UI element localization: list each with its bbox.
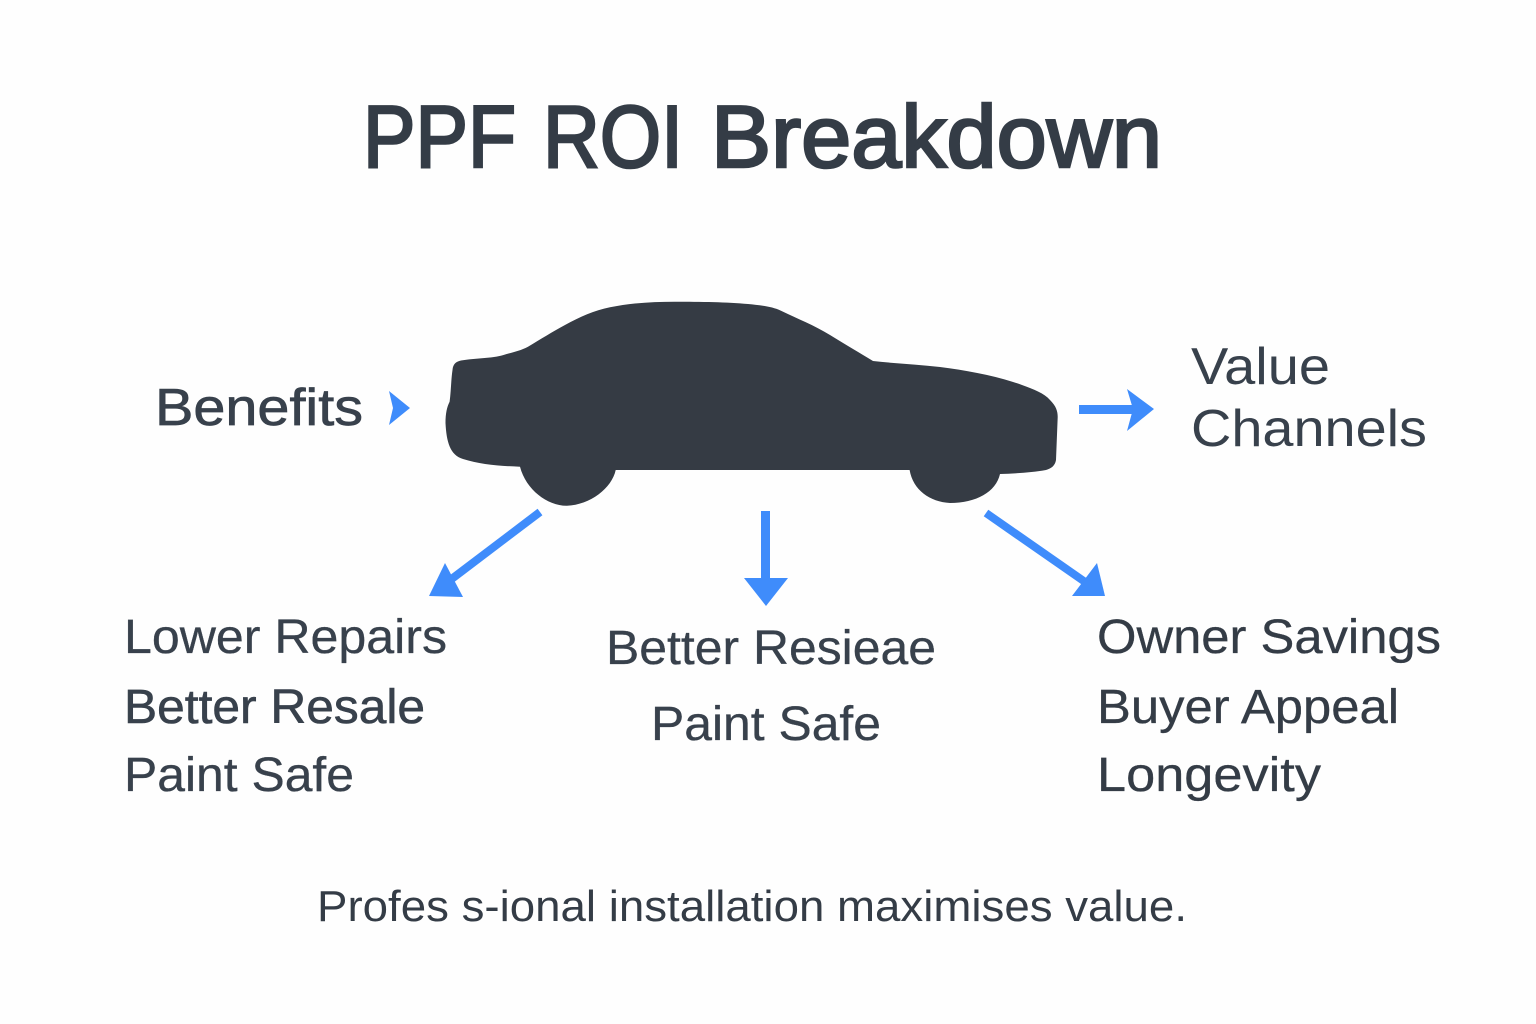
arrow: to value channels [1079, 389, 1154, 431]
label: value channels: Channels [1191, 400, 1427, 458]
label: value channels [1191, 338, 1427, 458]
title: PPF [363, 87, 516, 186]
list: left column: Lower Repairs [124, 611, 447, 664]
list: centre column [606, 622, 936, 751]
list: centre column: Better Resieae [606, 622, 936, 675]
list: right column: Owner Savings [1097, 611, 1441, 664]
list: right column: Buyer Appeal [1097, 681, 1399, 734]
icon: car silhouette [446, 302, 1058, 506]
arrow: down left [429, 512, 540, 597]
list: centre column: Paint Safe [651, 698, 881, 751]
title: Breakdown [711, 87, 1162, 186]
list: right column [1097, 611, 1441, 802]
list: left column [124, 611, 447, 802]
icon: benefits arrowhead [389, 391, 410, 425]
footer note: Profes s-ional installation maximises value. [317, 882, 1187, 931]
arrow: down centre [744, 511, 788, 606]
list: left column: Better Resale [124, 681, 425, 734]
arrow: down right [986, 513, 1105, 596]
title [363, 87, 1162, 186]
label: value channels: Value [1191, 338, 1330, 396]
list: left column: Paint Safe [124, 749, 354, 802]
title: ROI [543, 87, 683, 186]
list: right column: Longevity [1097, 749, 1321, 802]
label: Benefits: Benefits [155, 379, 363, 437]
